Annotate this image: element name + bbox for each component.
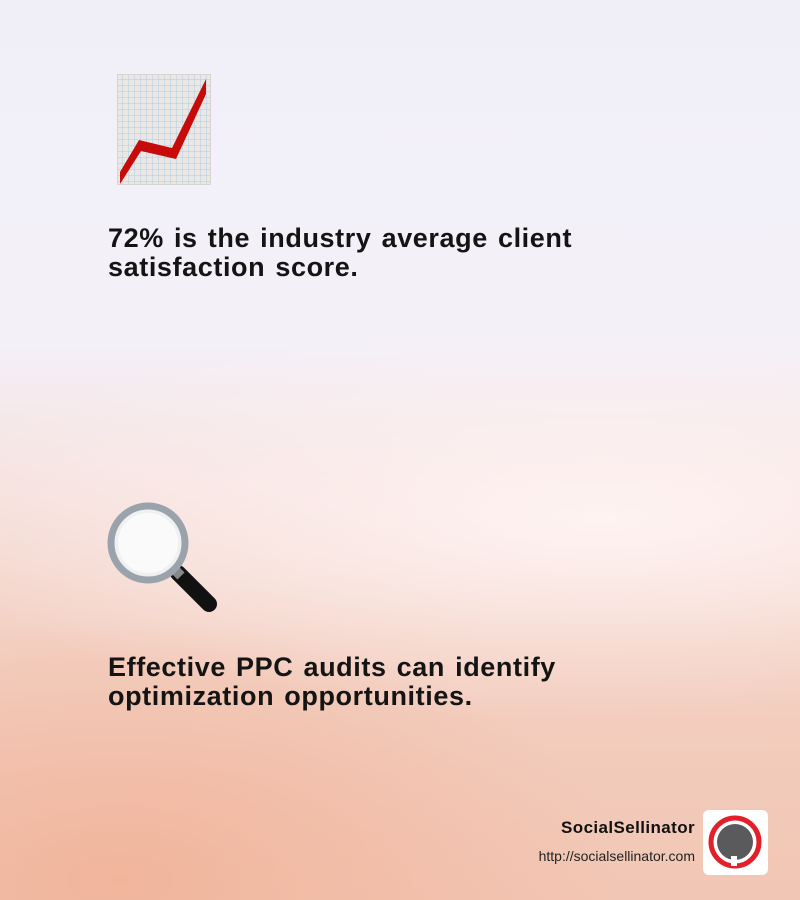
text: audits: Effective PPC audits can identify	[108, 652, 556, 682]
logo	[703, 810, 768, 875]
text: audits	[108, 652, 556, 711]
brand name: SocialSellinator	[561, 818, 695, 837]
text: satisfaction: 72% is the industry average client	[108, 223, 572, 253]
text: satisfaction	[108, 223, 572, 282]
text: satisfaction: satisfaction score.	[108, 252, 358, 282]
text: audits: optimization opportunities.	[108, 681, 473, 711]
brand url: http://socialsellinator.com	[539, 848, 695, 864]
icon: chart	[117, 74, 211, 185]
icon: magnifier	[108, 502, 217, 612]
